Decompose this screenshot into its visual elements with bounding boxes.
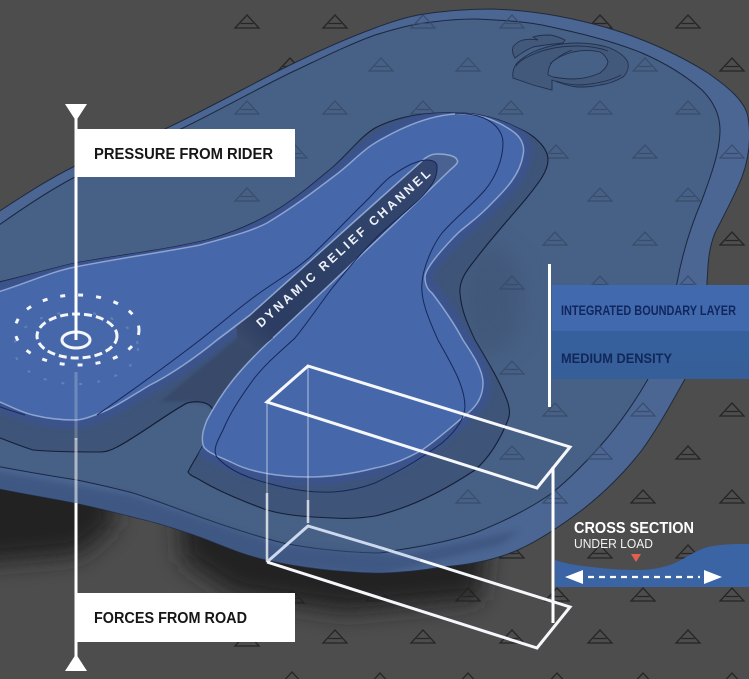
pad triangle pattern (faint): [235, 15, 744, 503]
channel recess: [235, 154, 458, 338]
label: pressure from rider: PRESSURE FROM RIDER: [94, 146, 273, 163]
layer divider line: [548, 264, 551, 407]
cross section heading: UNDER LOAD: [574, 537, 653, 551]
text: dynamic relief channel: DYNAMIC RELIEF CHANNEL: [254, 166, 433, 330]
label: medium density: [552, 331, 749, 379]
background triangle pattern: [235, 15, 744, 679]
cross-section wireframe: [267, 366, 570, 648]
cross section: deformed layer: [555, 544, 749, 587]
arrow: up from road: [65, 654, 87, 671]
pressure rings: [14, 295, 139, 384]
label: medium density: MEDIUM DENSITY: [561, 351, 672, 366]
inner shadow on pad: [0, 245, 522, 575]
cross section heading: CROSS SECTION: [574, 520, 694, 537]
label: forces from road: FORCES FROM ROAD: [94, 610, 247, 627]
arrow: spread: [565, 570, 722, 584]
drop shadow under pad: [0, 430, 490, 612]
label: pressure from rider: [76, 129, 295, 177]
bevel bump outline: [117, 402, 213, 447]
bevel: medium density layer: [0, 113, 548, 518]
arrow: down from rider: [65, 104, 87, 121]
label: integrated boundary layer: [552, 285, 749, 331]
pad: inner panel: [0, 19, 720, 553]
saddle top surface: [0, 114, 524, 477]
channel lower recess: [160, 318, 275, 412]
label: forces from road: [76, 593, 295, 642]
channel and inner outlines: [0, 114, 503, 492]
logo: [512, 35, 628, 90]
force axis line: [74, 104, 78, 658]
cross section heading: [574, 520, 694, 551]
saddle glow band: [0, 114, 524, 477]
load marker: [631, 554, 641, 562]
channel dark strip: [236, 160, 437, 352]
